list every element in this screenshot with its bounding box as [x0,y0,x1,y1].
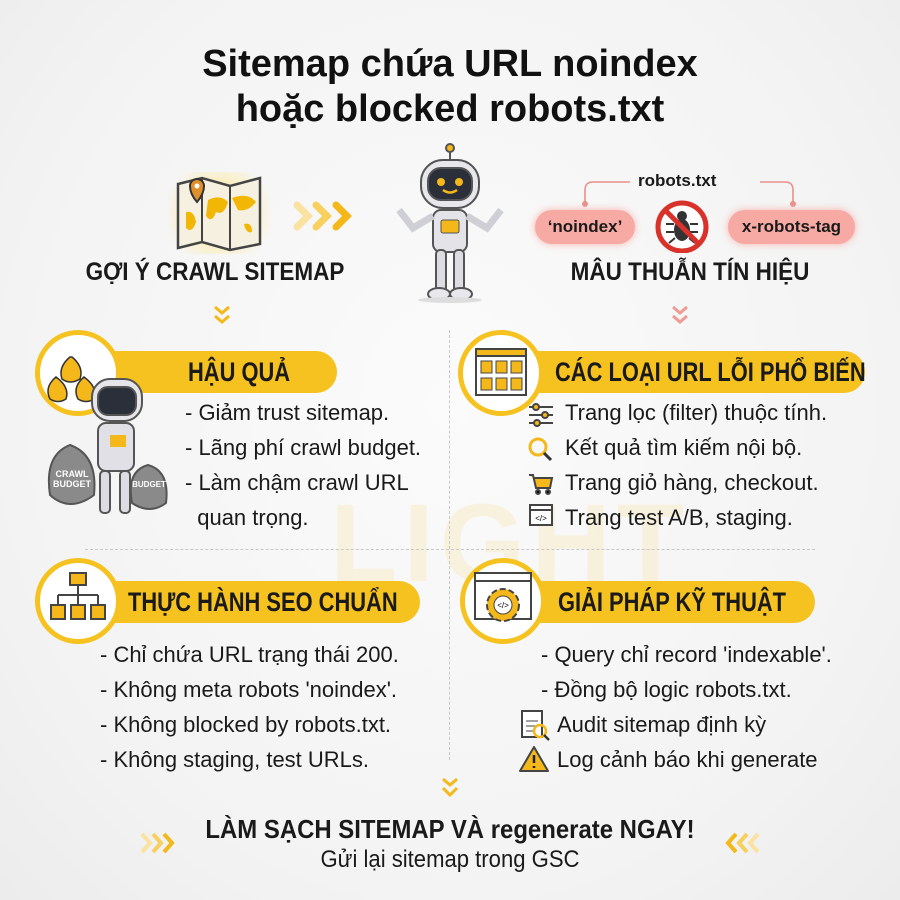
icon: sad robot with bags: BUDGET [132,480,166,489]
icon: sad robot with bags [48,378,168,514]
icon: gear page: </> [497,601,509,610]
arrow: chevrons to robot [294,202,352,230]
banner bar [75,581,420,623]
pill: x-robots-tag [728,210,855,244]
list: best practices: - Không blocked by robots.txt. [100,712,391,737]
title: Sitemap chứa URL noindex [202,43,698,85]
icon: map [168,172,270,254]
conclusion text [205,814,695,873]
icon: sad robot with bags: BUDGET [53,479,92,489]
conclusion text: Gửi lại sitemap trong GSC [321,846,579,873]
icon: robot center [396,143,504,303]
arrow: left chevrons [140,832,175,854]
pill: noindex: ‘noindex’ [548,217,622,236]
arrow: down right [672,306,688,324]
list: best practices: - Chỉ chứa URL trạng thái 200. [100,642,399,667]
pill: x-robots-tag: x-robots-tag [742,217,841,236]
banner bar [503,581,815,623]
list: consequences: - Làm chậm crawl URL [185,470,409,495]
banner bar [75,351,337,393]
conclusion text: LÀM SẠCH SITEMAP VÀ regenerate NGAY! [205,814,695,844]
list: consequences: - Giảm trust sitemap. [185,400,389,425]
list: consequences: - Lãng phí crawl budget. [185,435,421,460]
arrow: down to conclusion [442,778,458,797]
watermark: LIGHT [330,482,690,605]
title [202,43,698,130]
icon: money bags [35,330,121,416]
arrow: right chevrons [725,832,760,854]
pill: noindex [535,210,635,244]
heading: HẬU QUẢ [188,357,290,387]
list: consequences: quan trọng. [197,505,309,530]
banner bar [500,351,865,393]
icon: sad robot with bags: CRAWL [56,469,89,479]
list: technical solutions: - Đồng bộ logic robots.txt. [541,677,792,702]
panel: cac loai url loi [458,330,866,530]
icon: grid page [458,330,544,416]
panel: giai phap ky thuat: Audit sitemap định kỳ [557,712,766,737]
icon: sitemap tree [35,558,121,644]
panel: thuc hanh seo chuan [35,558,420,772]
list: consequences [185,400,421,530]
panel: giai phap ky thuat: Log cảnh báo khi generate [557,747,818,772]
list: technical solutions [541,642,832,702]
list: error URL types: Kết quả tìm kiếm nội bộ. [565,435,802,460]
list: technical solutions: - Query chỉ record 'indexable'. [541,642,832,667]
list: error URL types [565,400,827,530]
heading: THỰC HÀNH SEO CHUẨN [128,587,398,617]
icons: audit and warning [519,710,550,772]
list: error URL types: Trang test A/B, staging. [565,505,793,530]
heading: GIẢI PHÁP KỸ THUẬT [558,587,786,617]
label: robots.txt: robots.txt [638,171,716,190]
icon: gear page [460,558,546,644]
title: hoặc blocked robots.txt [236,88,664,130]
heading: CÁC LOẠI URL LỖI PHỔ BIẾN [555,357,866,387]
list: error URL types: Trang giỏ hàng, checkout. [565,470,819,495]
label: goi y crawl sitemap: GỢI Ý CRAWL SITEMAP [86,258,344,286]
list: best practices: - Không staging, test URLs. [100,747,369,772]
dividers [85,549,815,550]
icons: list: </> [535,514,547,523]
list: error URL types: Trang lọc (filter) thuộc tính. [565,400,827,425]
panel: hau qua [35,330,421,530]
arrow: down left [214,306,230,324]
list: best practices: - Không meta robots 'noindex'. [100,677,397,702]
list: best practices [100,642,399,772]
panel: giai phap ky thuat [460,558,832,772]
robots.txt diagram [530,171,859,253]
label: mau thuan tin hieu: MÂU THUẪN TÍN HIỆU [571,258,809,286]
icons: list [528,403,554,526]
